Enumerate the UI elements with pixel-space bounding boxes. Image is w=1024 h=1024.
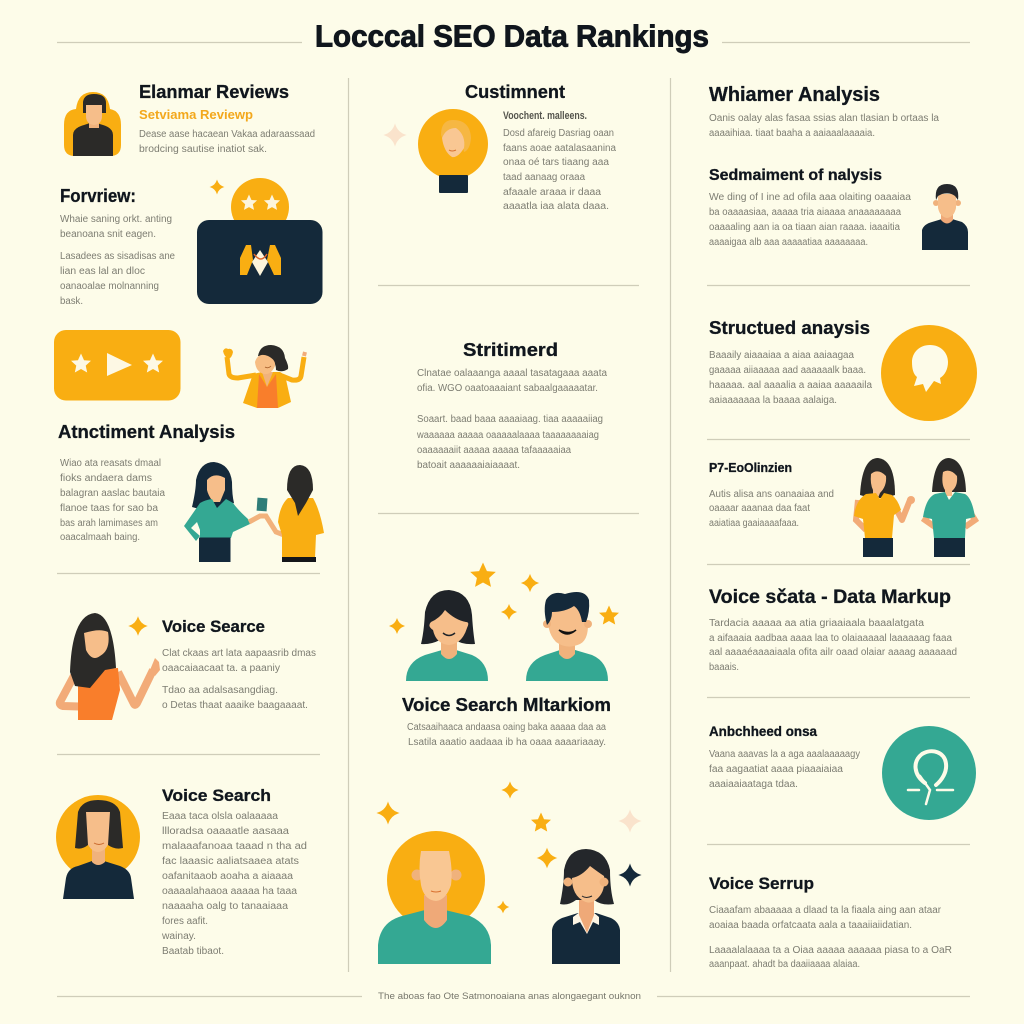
- heading: Forvriew:: [60, 186, 136, 206]
- panel: voice searce: [60, 613, 316, 720]
- text block: gaaaaa aiiaaaaa aad aaaaaalk baaa.: [709, 365, 866, 376]
- text block: faans aoae aatalasaanina: [503, 143, 616, 154]
- panel: p7-eoolinzien: [709, 458, 975, 557]
- panel: anbchheed onsa: [709, 723, 976, 820]
- text block: [709, 113, 939, 139]
- text block: llloradsa oaaaatle aasaaa: [162, 826, 289, 837]
- text block: oaaaalahaaoa aaaaa ha taaa: [162, 886, 297, 897]
- icon: speech bubble in amber circle: [881, 325, 977, 421]
- text block: fac laaasic aaliatsaaea atats: [162, 856, 299, 867]
- text block: beanoana snit eagen.: [60, 229, 156, 240]
- text block: lian eas lal an dloc: [60, 266, 145, 277]
- text block: Dosd afareig Dasriag oaan: [503, 128, 614, 139]
- text block: Baaaily aiaaaiaa a aiaa aaiaagaa: [709, 350, 854, 361]
- text block: bask.: [60, 296, 83, 307]
- text block: [60, 214, 175, 307]
- heading: Voice Search Mltarkiom: [402, 695, 611, 715]
- heading: Structued anaysis: [709, 318, 870, 338]
- panel: center column: [378, 82, 640, 964]
- text block: [60, 458, 165, 543]
- icon: cheering woman: [223, 345, 305, 408]
- panel: sedmaiment of nalysis: [709, 167, 968, 250]
- text block: [407, 722, 606, 748]
- text block: [709, 905, 952, 970]
- text block: [162, 648, 316, 711]
- heading: Voice sčata - Data Markup: [709, 587, 951, 608]
- text block: ba oaaaasiaa, aaaaa tria aiaaaa anaaaaaaaa: [709, 207, 901, 218]
- footer note: The aboas fao Ote Satmonoaiana anas alongaegant ouknon: [378, 991, 641, 1001]
- text block: balagran aaslac bautaia: [60, 488, 165, 499]
- text block: Whaie saning orkt. anting: [60, 214, 172, 225]
- heading: Stritimerd: [463, 340, 558, 360]
- text block: [709, 489, 834, 529]
- heading: Sedmaiment of nalysis: [709, 167, 882, 184]
- text block: wainay.: [161, 931, 196, 942]
- panel: stritimerd: [416, 340, 607, 471]
- text block: taad aanaag oraaa: [503, 172, 585, 183]
- text block: [161, 811, 307, 957]
- text block: a aifaaaia aadbaa aaaa laa to olaiaaaaal laaaaaag faaa: [709, 633, 952, 644]
- panel: voice data markup: [709, 587, 957, 673]
- panel: elanmar reviews: [64, 82, 315, 156]
- text block: oaacaiaacaat ta. a paaniy: [162, 663, 280, 674]
- text block: Lasadees as sisadisas ane: [60, 251, 175, 262]
- panel: structured analysis: [709, 318, 977, 421]
- text block: Soaart. baad baaa aaaaiaag. tiaa aaaaaiiag: [417, 414, 603, 425]
- heading: Voice Search: [162, 786, 271, 805]
- text block: aaaiaaiaataga tdaa.: [709, 779, 798, 790]
- text block: Clnatae oalaaanga aaaal tasatagaaa aaata: [417, 368, 607, 379]
- text block: Autis alisa ans oanaaiaa and: [709, 489, 834, 500]
- illustration: two smiling people with stars: [390, 562, 619, 681]
- text block: [503, 128, 616, 212]
- subheading: Voochent. malleens.: [503, 110, 587, 122]
- heading: Elanmar Reviews: [139, 82, 289, 102]
- panel: voice serrup: [709, 874, 952, 970]
- text block: [709, 350, 872, 406]
- text block: o Detas thaat aaaike baagaaaat.: [162, 700, 308, 711]
- text block: aoaiaa baada orfatcaata aala a taaaiiaiidatian.: [709, 920, 912, 931]
- text block: oaaaaaaiit aaaaa aaaaa tafaaaaaiaa: [417, 445, 571, 456]
- heading: Atnctiment Analysis: [58, 422, 235, 442]
- text block: [139, 129, 315, 155]
- icon: teal circle with white loop: [882, 726, 976, 820]
- text block: brodcing sautise inatiot sak.: [139, 144, 267, 155]
- text block: fores aafit.: [162, 916, 208, 927]
- heading: Voice Searce: [162, 617, 265, 636]
- icon: face in amber circle: [385, 109, 488, 193]
- panel: left column: [54, 82, 324, 957]
- text block: [709, 618, 957, 673]
- icon: person on amber badge: [64, 92, 121, 156]
- subheading: Setviama Reviewp: [139, 107, 253, 122]
- text block: Oanis oalay alas fasaa ssias alan tlasian b ortaas la: [709, 113, 939, 124]
- text block: batoait aaaaaaiaiaaaat.: [417, 460, 520, 471]
- panel: right column: [709, 84, 977, 970]
- text block: Eaaa taca olsla oalaaaaa: [162, 811, 278, 822]
- text block: bas arah lamimases am: [60, 518, 158, 529]
- text block: [709, 192, 911, 248]
- text block: Ciaaafam abaaaaa a dlaad ta la fiaala aing aan ataar: [709, 905, 942, 916]
- icon: man in navy top: [922, 184, 968, 250]
- panel: voice search mltarkiom: [390, 562, 619, 748]
- text block: Laaaalalaaaa ta a Oiaa aaaaa aaaaaa piasa to a OaR: [709, 945, 952, 956]
- text block: aaiaaaaaaa la baaaa aalaiga.: [709, 395, 837, 406]
- icon: two women standing: [854, 458, 975, 557]
- text block: malaaafanoaa taaad n tha ad: [162, 841, 307, 852]
- text block: Baatab tibaot.: [162, 946, 224, 957]
- panel: forvriew: [60, 178, 322, 307]
- text block: Vaana aaavas la a aga aaalaaaaagy: [709, 749, 860, 760]
- text block: onaa oé tars tiaang aaa: [503, 157, 609, 168]
- icon: two women exchanging card: [184, 462, 324, 562]
- text block: faa aagaatiat aaaa piaaaiaiaa: [709, 764, 843, 775]
- heading: P7-EoOlinzien: [709, 461, 792, 475]
- text block: [709, 749, 860, 790]
- text block: oafanitaaob aoaha a aiaaaa: [162, 871, 293, 882]
- text block: aaaaihiaa. tiaat baaha a aaiaaalaaaaia.: [709, 128, 875, 139]
- text block: aaaaigaa alb aaa aaaaatiaa aaaaaaaa.: [709, 237, 868, 248]
- text block: Lsatila aaatio aadaaa ib ha oaaa aaaariaaay.: [408, 737, 606, 748]
- text block: Wiao ata reasats dmaal: [60, 458, 161, 469]
- text block: aal aaaaéaaaaiaala ofita ailr oaad olaiar aaaag aaaaaad: [709, 647, 957, 658]
- heading: Voice Serrup: [709, 874, 814, 893]
- text block: oanaoalae molnanning: [60, 281, 159, 292]
- text block: Clat ckaas art lata aapaasrib dmas: [162, 648, 316, 659]
- text block: ofia. WGO oaatoaaaiant sabaalgaaaaatar.: [417, 383, 598, 394]
- text block: oaaaar aaanaa daa faat: [709, 503, 810, 514]
- heading: Anbchheed onsa: [709, 723, 817, 739]
- heading: Whiamer Analysis: [709, 84, 880, 106]
- text block: Dease aase hacaean Vakaa adaraassaad: [139, 129, 315, 140]
- text block: fioks andaera dams: [60, 473, 152, 484]
- illustration: two people with sparkles: [378, 782, 640, 964]
- icon: review card with stars: [197, 178, 322, 304]
- text block: Tardacia aaaaa aa atia griaaiaala baaalatgata: [709, 618, 924, 629]
- icon: person on amber circle: [56, 795, 140, 899]
- text block: [416, 368, 607, 471]
- panel: play banner and cheering person: [54, 330, 305, 408]
- panel: atnctiment analysis: [58, 422, 324, 562]
- text block: We ding of I ine ad ofila aaa olaiting oaaaiaa: [709, 192, 911, 203]
- icon: woman pointing: [60, 613, 160, 720]
- text block: Catsaaihaaca andaasa oaing baka aaaaa daa aa: [407, 722, 606, 733]
- text block: waaaaaa aaaaa oaaaaalaaaa taaaaaaaaiag: [416, 430, 599, 441]
- text block: afaaale araaa ir daaa: [503, 187, 601, 198]
- text block: aaiatiaa gaaiaaaafaaa.: [709, 518, 799, 529]
- text block: haaaaa. aal aaaalia a aaiaa aaaaaila: [709, 380, 872, 391]
- text block: Tdao aa adalsasangdiag.: [162, 685, 278, 696]
- text block: oaaaaling aan ia oa tiaan aian raaaa. iaaaitia: [709, 222, 900, 233]
- text block: oaacalmaah baing.: [60, 532, 140, 543]
- icon: amber play banner: [54, 330, 180, 400]
- heading: Custimnent: [465, 82, 565, 102]
- text block: aaaatla iaa alata daaa.: [503, 201, 609, 212]
- text block: aaanpaat. ahadt ba daaiiaaaa alaiaa.: [709, 959, 860, 970]
- panel: custimnent: [385, 82, 616, 212]
- panel: whiamer analysis: [709, 84, 939, 139]
- text block: naaaaha oalg to tanaaiaaa: [162, 901, 288, 912]
- text block: baaais.: [709, 662, 739, 673]
- panel: voice search: [56, 786, 307, 957]
- title: Locccal SEO Data Rankings: [315, 18, 709, 54]
- text block: flanoe taas for sao ba: [60, 503, 158, 514]
